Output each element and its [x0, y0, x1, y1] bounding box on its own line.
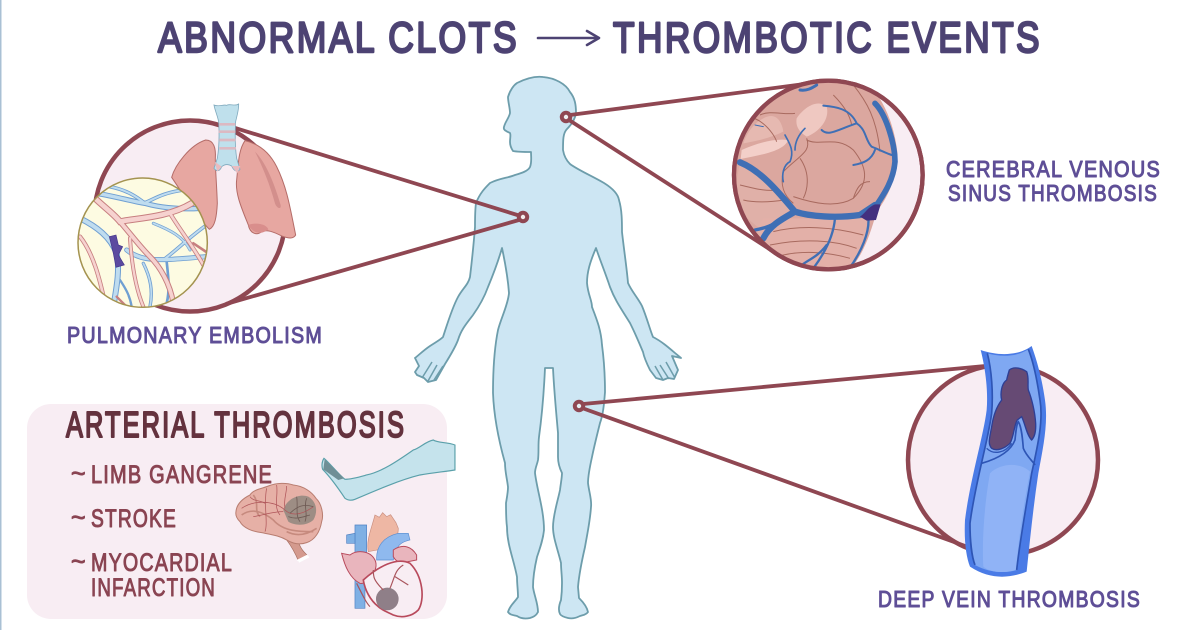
- label: deep vein thrombosis: DEEP VEIN THROMBOSIS: [878, 586, 1141, 612]
- leader lines to chest: [226, 127, 527, 304]
- title: ABNORMAL CLOTS: [158, 14, 519, 62]
- magnifier circle: lungs background: [94, 120, 286, 312]
- arrow: title arrow: [538, 31, 599, 45]
- label: cerebral venous sinus thrombosis: [946, 156, 1161, 206]
- list: arterial outcomes: ~: [71, 460, 87, 488]
- fingers: [422, 362, 675, 381]
- list: arterial outcomes: ~: [71, 548, 87, 576]
- list: arterial outcomes: STROKE: [91, 505, 177, 533]
- callout: pulmonary embolism: [67, 104, 527, 348]
- title: [158, 14, 1042, 62]
- icon: lungs and trachea: [172, 104, 296, 238]
- label: cerebral venous sinus thrombosis: SINUS THROMBOSIS: [948, 180, 1158, 206]
- list: arterial outcomes: LIMB GANGRENE: [91, 461, 273, 489]
- icon: vein with thrombus: [965, 346, 1046, 577]
- list: arterial outcomes: [71, 460, 273, 602]
- list: arterial outcomes: ~: [71, 504, 87, 532]
- body silhouette: [415, 77, 681, 618]
- magnifier circle: [908, 365, 1098, 555]
- list: arterial outcomes: MYOCARDIAL: [91, 549, 233, 577]
- heading: arterial thrombosis: ARTERIAL THROMBOSIS: [66, 404, 406, 445]
- magnifier circle: brain with venous sinus clot: [730, 81, 923, 272]
- title: THROMBOTIC EVENTS: [613, 14, 1042, 62]
- label: pulmonary embolism: PULMONARY EMBOLISM: [67, 322, 323, 348]
- leader lines to head: [562, 83, 812, 252]
- callout: deep vein thrombosis: [575, 346, 1141, 612]
- label: cerebral venous sinus thrombosis: CEREBRAL VENOUS: [946, 156, 1161, 182]
- leader lines to thigh: [575, 366, 985, 547]
- icon: brain with stroke: [236, 483, 323, 563]
- magnified inset: pulmonary vessels with clot: [78, 178, 208, 308]
- icon: leg with gangrene: [322, 440, 455, 500]
- list: arterial outcomes: INFARCTION: [91, 574, 216, 602]
- icon: heart with infarct: [342, 513, 422, 617]
- callout: cerebral venous sinus thrombosis: [562, 81, 1161, 272]
- panel: arterial thrombosis: [27, 404, 455, 619]
